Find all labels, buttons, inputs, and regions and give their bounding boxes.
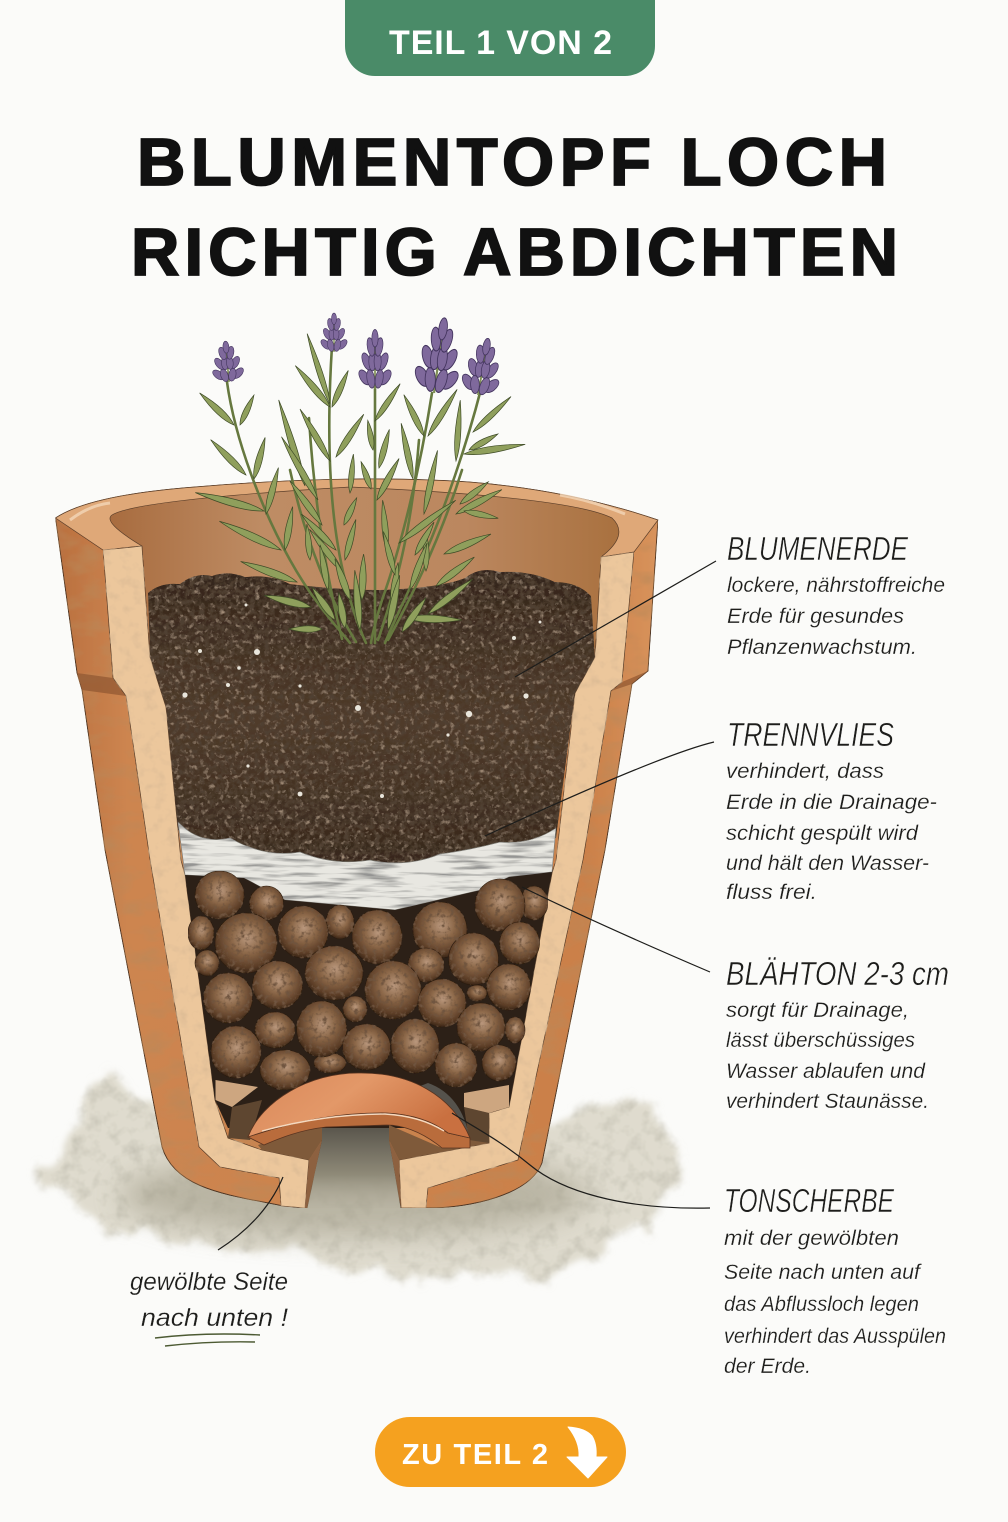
label: Trennvlies: fluss frei.: [726, 881, 817, 904]
shard highlight: [262, 1114, 444, 1131]
shard curved top: [248, 1073, 470, 1138]
label: Tonscherbe: verhindert das Ausspülen: [724, 1325, 946, 1348]
label: Blähton: lässt überschüssiges: [726, 1029, 915, 1052]
label: Tonscherbe: [724, 1182, 946, 1378]
label: Blumenerde: [727, 530, 945, 659]
illustration: terracotta pot cross-section: [56, 479, 658, 1208]
lavender plant: [194, 313, 526, 643]
header tab: part label: [345, 0, 655, 76]
label: Tonscherbe: Seite nach unten auf: [724, 1261, 922, 1284]
potting soil layer: [148, 570, 595, 869]
label: Tonscherbe: TONSCHERBE: [724, 1182, 895, 1219]
rim shadow: [77, 671, 648, 696]
callout: curved side down: [130, 1268, 288, 1346]
dark gaps behind clay balls: [185, 872, 552, 1128]
lavender flower spikes: [208, 313, 508, 399]
label: Blähton: [726, 955, 949, 1113]
ground wash under pot: [40, 1070, 680, 1283]
label: Trennvlies: [726, 716, 937, 904]
expanded clay drainage layer: [185, 871, 552, 1128]
darker shadow close to pot base: [120, 1153, 590, 1237]
header tab: part label: TEIL 1 VON 2: [389, 24, 612, 62]
label: Blähton: BLÄHTON 2-3 cm: [726, 955, 949, 992]
label: Trennvlies: schicht gespült wird: [726, 822, 919, 845]
cut face right wall: [399, 552, 634, 1208]
inner ledge pieces: [216, 1080, 509, 1113]
label: Tonscherbe: mit der gewölbten: [724, 1227, 899, 1250]
title: BLUMENTOPF LOCH: [137, 125, 887, 200]
callout: curved side down: nach unten !: [141, 1304, 288, 1332]
drain hole walls: [305, 1140, 401, 1208]
perlite specks in soil: [182, 604, 542, 798]
button: to part 2: [375, 1417, 626, 1487]
label: Blähton: verhindert Staunässe.: [726, 1090, 929, 1113]
dark recess between ledge and shard: [228, 1100, 489, 1143]
pot exterior: [56, 479, 658, 1208]
label: Trennvlies: TRENNVLIES: [727, 716, 894, 753]
shadow behind shard: [410, 1083, 470, 1146]
callout: curved side down: gewölbte Seite: [130, 1268, 288, 1296]
label: Tonscherbe: das Abflussloch legen: [724, 1293, 919, 1316]
label: Blähton: sorgt für Drainage,: [726, 999, 909, 1022]
icon: curved arrow down: [567, 1427, 607, 1478]
clay balls: [188, 871, 548, 1090]
label: Blumenerde: lockere, nährstoffreiche: [727, 574, 945, 597]
shard lower lip: [248, 1113, 470, 1148]
pot shard and drain corner: [216, 1073, 509, 1160]
label: Trennvlies: Erde in die Drainage-: [726, 791, 937, 814]
label: Blähton: Wasser ablaufen und: [726, 1060, 926, 1083]
label: Tonscherbe: der Erde.: [724, 1355, 811, 1378]
label: Trennvlies: und hält den Wasser-: [726, 852, 929, 875]
title: [131, 125, 898, 290]
stems: [227, 346, 481, 643]
label: Blumenerde: Pflanzenwachstum.: [727, 636, 917, 659]
brown floor ledges below shard: [258, 1125, 489, 1160]
label: Blumenerde: BLUMENERDE: [727, 530, 909, 567]
label: Blumenerde: Erde für gesundes: [727, 605, 905, 628]
leader lines: [218, 561, 716, 1250]
label: Trennvlies: verhindert, dass: [726, 760, 885, 783]
title: RICHTIG ABDICHTEN: [131, 215, 898, 290]
cut face left wall: [103, 546, 309, 1208]
pot inner back wall: [110, 487, 619, 660]
rim top face: [56, 479, 658, 557]
button: to part 2: ZU TEIL 2: [402, 1439, 548, 1471]
drain hole ground gap: [307, 1125, 401, 1208]
rim highlights: [70, 495, 625, 520]
separation fleece layer: [178, 822, 556, 910]
leaves: [194, 333, 526, 634]
